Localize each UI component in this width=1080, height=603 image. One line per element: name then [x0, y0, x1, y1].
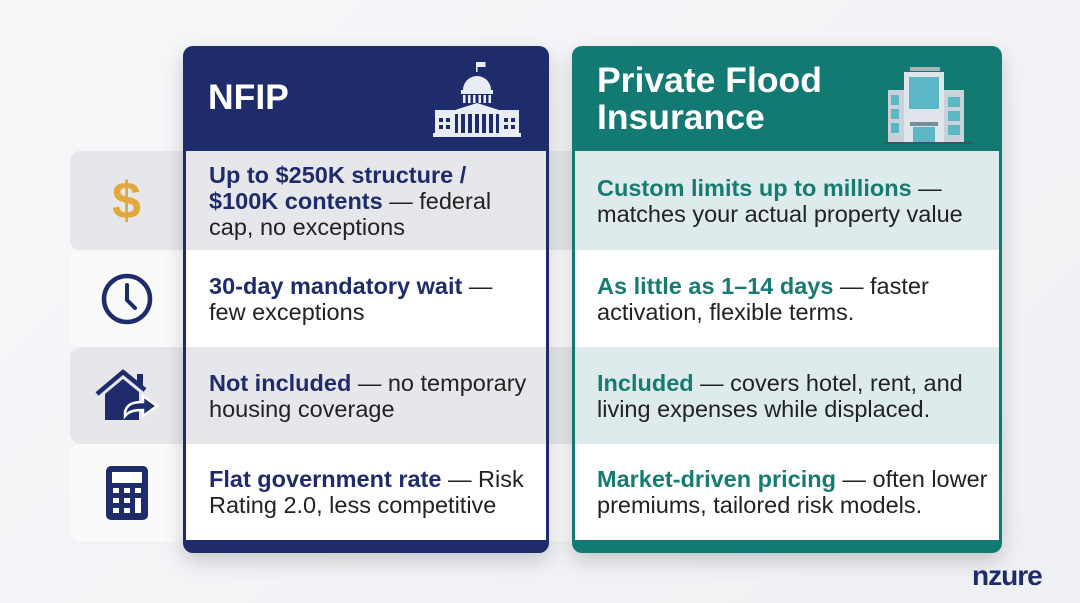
row 2: waiting period: few exceptions	[209, 298, 364, 324]
row 1: coverage limits	[186, 151, 546, 250]
row 1: coverage limits: matches your actual property value	[597, 200, 963, 226]
icon: house with arrow	[96, 369, 159, 420]
heading: Private Flood Insurance: Private Flood	[597, 60, 822, 100]
icon: clock	[102, 274, 152, 324]
row 4: pricing: Rating 2.0, less competitive	[209, 492, 496, 518]
icon: dollar: $	[112, 172, 141, 230]
row 3: living expenses	[186, 347, 546, 444]
row 2: waiting period: activation, flexible terms.	[597, 298, 854, 324]
row 2: waiting period	[575, 250, 999, 347]
icon: calculator	[106, 466, 148, 520]
row 3: living expenses: Not included — no temporary	[209, 370, 526, 396]
row 4: pricing: Flat government rate — Risk	[209, 466, 524, 492]
panel: NFIP	[183, 46, 549, 553]
icon: office building	[884, 67, 974, 144]
row 1: coverage limits: Custom limits up to millions —	[597, 174, 942, 200]
row 4: pricing: Market-driven pricing — often lower	[597, 466, 988, 492]
heading: NFIP: NFIP	[208, 77, 289, 117]
row 3: living expenses: Included — covers hotel, rent, and	[597, 370, 963, 396]
logo: nzure: nzure	[972, 560, 1042, 591]
row 2: waiting period	[186, 250, 546, 347]
row 3: living expenses	[575, 347, 999, 444]
row band 4	[70, 444, 1000, 541]
icon: capitol building	[433, 62, 521, 137]
row 4: pricing: premiums, tailored risk models.	[597, 492, 922, 518]
heading: Private Flood Insurance: Insurance	[597, 97, 765, 137]
row 1: coverage limits: Up to $250K structure /	[209, 162, 466, 188]
row 4: pricing	[186, 444, 546, 540]
row band 1	[70, 151, 1000, 250]
row band 3	[70, 347, 1000, 444]
row 3: living expenses: living expenses while displaced.	[597, 396, 930, 422]
row band 2	[70, 250, 1000, 347]
row 1: coverage limits: cap, no exceptions	[209, 214, 405, 240]
panel: Private Flood Insurance	[572, 46, 1002, 553]
row 1: coverage limits: $100K contents — federal	[209, 188, 491, 214]
row 4: pricing	[575, 444, 999, 540]
row 2: waiting period: 30-day mandatory wait —	[209, 272, 492, 298]
heading: Private Flood Insurance	[597, 60, 822, 137]
row 3: living expenses: housing coverage	[209, 396, 395, 422]
row 1: coverage limits	[575, 151, 999, 250]
row 2: waiting period: As little as 1–14 days — faster	[597, 272, 929, 298]
